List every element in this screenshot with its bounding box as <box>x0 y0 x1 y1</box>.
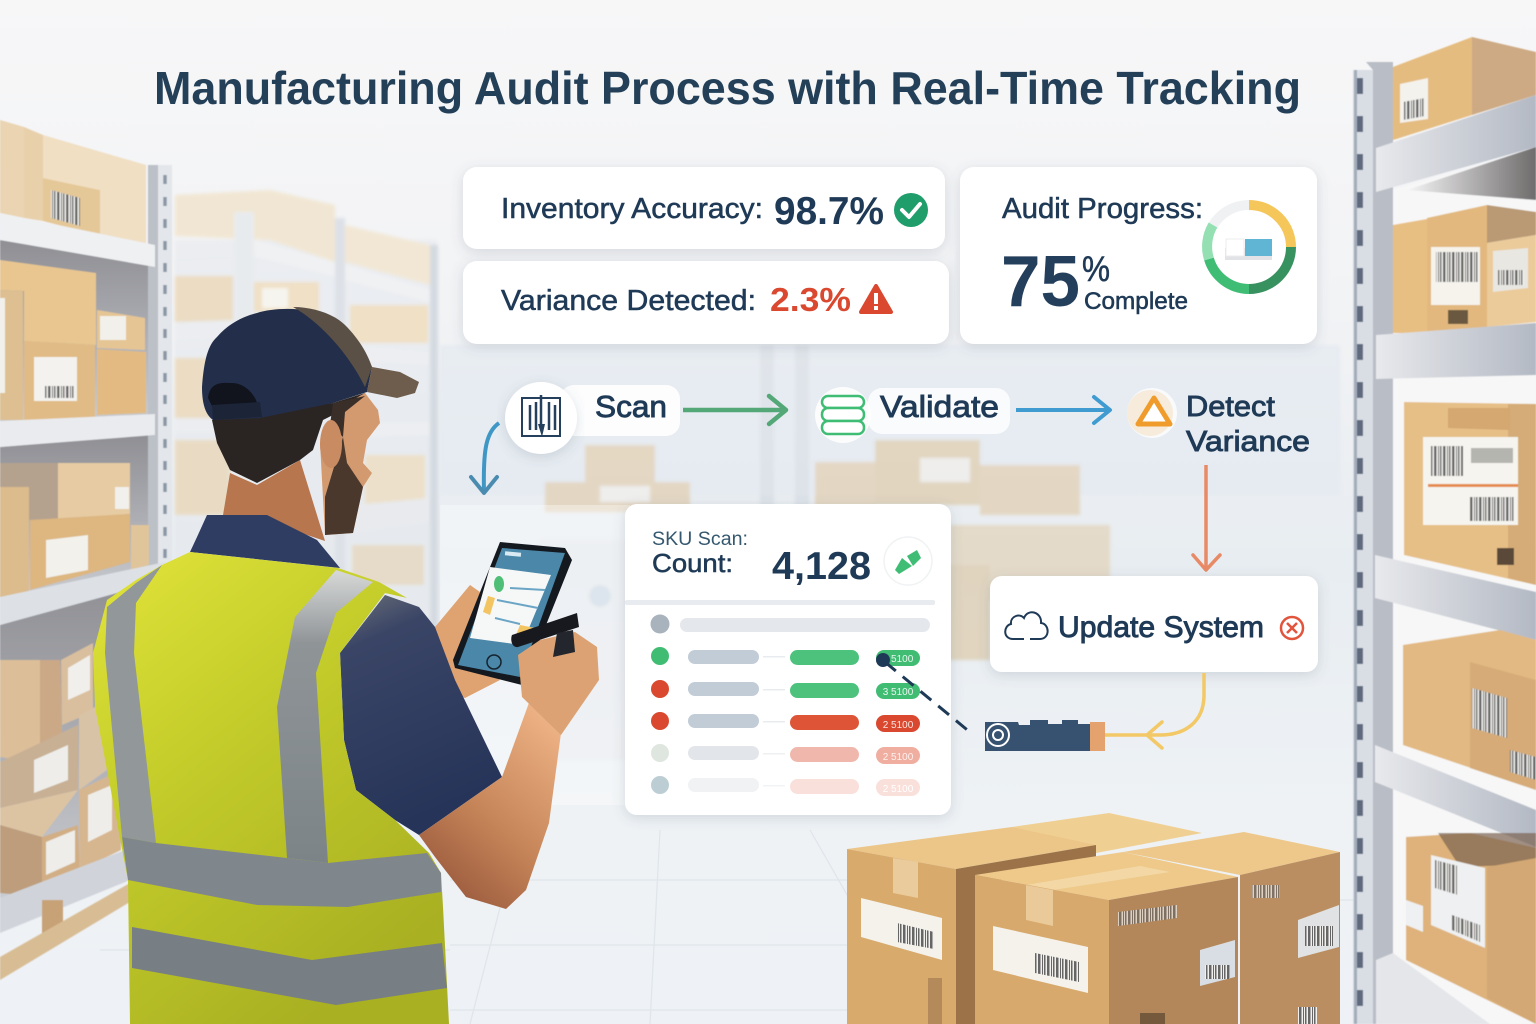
progress ring <box>1207 205 1291 289</box>
validate pill <box>868 388 1010 434</box>
right shelving with boxes <box>1353 37 1536 1024</box>
wall gap <box>1393 150 1536 1024</box>
under shelf shadow 1 <box>1407 147 1536 200</box>
panel: inventory accuracy <box>463 167 945 249</box>
handheld scanner <box>511 613 579 657</box>
shelf board 1 <box>0 213 155 267</box>
near hand <box>518 632 599 735</box>
label: count: Count: <box>652 548 733 578</box>
arrow: detect to update <box>1193 465 1220 570</box>
right shelf upright <box>1353 62 1393 1024</box>
scan pill <box>560 385 680 436</box>
icon: green check <box>894 193 928 227</box>
value: count: 4,128 <box>772 545 871 588</box>
cap <box>202 307 419 420</box>
arrow: scan to validate <box>683 396 786 424</box>
list header row <box>650 614 930 634</box>
vest band lower <box>132 927 447 1005</box>
label: update system: Update System <box>1058 611 1264 644</box>
right shelf board 1 <box>1376 95 1536 192</box>
ear <box>320 420 342 468</box>
arrow: scan down <box>471 423 499 493</box>
second right boxes <box>1393 205 1536 333</box>
list row 5 <box>651 776 920 796</box>
shelf interiors <box>0 240 150 900</box>
faded warehouse background <box>175 190 1340 760</box>
panel: update system <box>990 576 1318 672</box>
detect label: Detect <box>1186 391 1275 423</box>
pallet <box>0 883 130 980</box>
panel: audit progress <box>960 167 1317 344</box>
value: 75: 75 <box>1001 242 1080 322</box>
value: 98.7%: 98.7% <box>774 190 884 233</box>
second row boxes <box>0 260 146 420</box>
box centre <box>975 852 1238 1024</box>
right shelf board 5 <box>1376 953 1490 1024</box>
label: inventory accuracy: Inventory Accuracy: <box>501 193 763 225</box>
faded centre shelves <box>440 345 1340 760</box>
panel: variance detected <box>463 261 949 344</box>
label: SKU scan: SKU Scan: <box>652 529 748 550</box>
icon: red x circle <box>1281 617 1303 639</box>
ring centre toggle <box>1225 239 1272 260</box>
dashed connector <box>876 653 971 733</box>
value: percent sign: % <box>1082 250 1110 289</box>
hi-vis vest <box>93 552 449 1024</box>
label: complete: Complete <box>1084 288 1188 315</box>
hair <box>212 393 365 483</box>
validate icon <box>815 387 871 443</box>
phone <box>453 542 572 685</box>
list row 4 <box>651 744 920 764</box>
shelf board 4 <box>0 848 130 933</box>
worker <box>93 307 599 1024</box>
box right <box>1123 832 1340 1024</box>
vest band upper <box>122 837 441 907</box>
foreground cardboard boxes <box>847 813 1340 1024</box>
label: audit progress: Audit Progress: <box>1002 193 1203 225</box>
icon: green marker <box>884 537 932 585</box>
box left <box>847 827 1096 1024</box>
right shelf board 2 <box>1376 323 1536 379</box>
value: 2.3%: 2.3% <box>770 281 851 318</box>
panel: SKU scan list <box>625 504 951 815</box>
shelf board 3 <box>0 562 165 625</box>
floor tiles <box>100 830 1380 1024</box>
lower boxes <box>0 643 121 897</box>
list row 5: 2 5100 <box>883 784 914 795</box>
variance label: Variance <box>1186 426 1310 458</box>
box rear <box>1012 813 1202 853</box>
top shelf boxes <box>0 120 146 244</box>
list row 1: 3 5100 <box>883 654 914 665</box>
list row 2: 3 5100 <box>883 687 914 698</box>
collar <box>190 515 340 568</box>
big right box <box>1404 402 1536 585</box>
arrow: validate to detect <box>1016 397 1110 423</box>
translucent panel <box>440 505 630 805</box>
list row 3: 2 5100 <box>883 720 914 731</box>
list row 2 <box>651 680 920 699</box>
third row boxes <box>0 463 149 600</box>
step: scan <box>505 382 680 454</box>
near forearm <box>419 700 561 909</box>
list row 3 <box>651 712 920 732</box>
sideburn <box>330 396 365 437</box>
detect icon <box>1127 388 1177 438</box>
left shelf upright <box>148 165 172 905</box>
icon: cloud <box>1005 612 1048 639</box>
list row 1 <box>651 647 920 666</box>
arrow: update to scanner <box>1105 673 1204 748</box>
list row 4: 2 5100 <box>883 752 914 763</box>
scan icon <box>505 382 577 454</box>
label: variance detected: Variance Detected: <box>501 285 756 317</box>
lower right box <box>1406 833 1536 1024</box>
face <box>320 393 380 535</box>
scan label: Scan <box>595 389 667 424</box>
shirt sleeve <box>340 595 502 835</box>
validate label: Validate <box>880 389 999 424</box>
right shelf board 4 <box>1375 745 1536 847</box>
left shelving with boxes <box>0 120 172 980</box>
vest left reflective strap <box>105 565 162 843</box>
icon: warning triangle <box>861 286 891 312</box>
beard <box>325 437 363 535</box>
shelf board 2 <box>0 414 155 447</box>
step: validate <box>815 387 1010 443</box>
right shelf board 3 <box>1375 555 1536 640</box>
barcode scanner bar <box>985 720 1105 751</box>
mid right box <box>1403 630 1536 790</box>
step: detect variance <box>1127 388 1310 458</box>
faded rear shelves left <box>175 190 438 740</box>
top right box <box>1393 37 1536 140</box>
vest right reflective strap <box>277 570 373 863</box>
neck <box>223 460 325 541</box>
far hand <box>435 585 500 698</box>
title: Manufacturing Audit Process with Real-Time Tracking <box>154 62 1301 114</box>
